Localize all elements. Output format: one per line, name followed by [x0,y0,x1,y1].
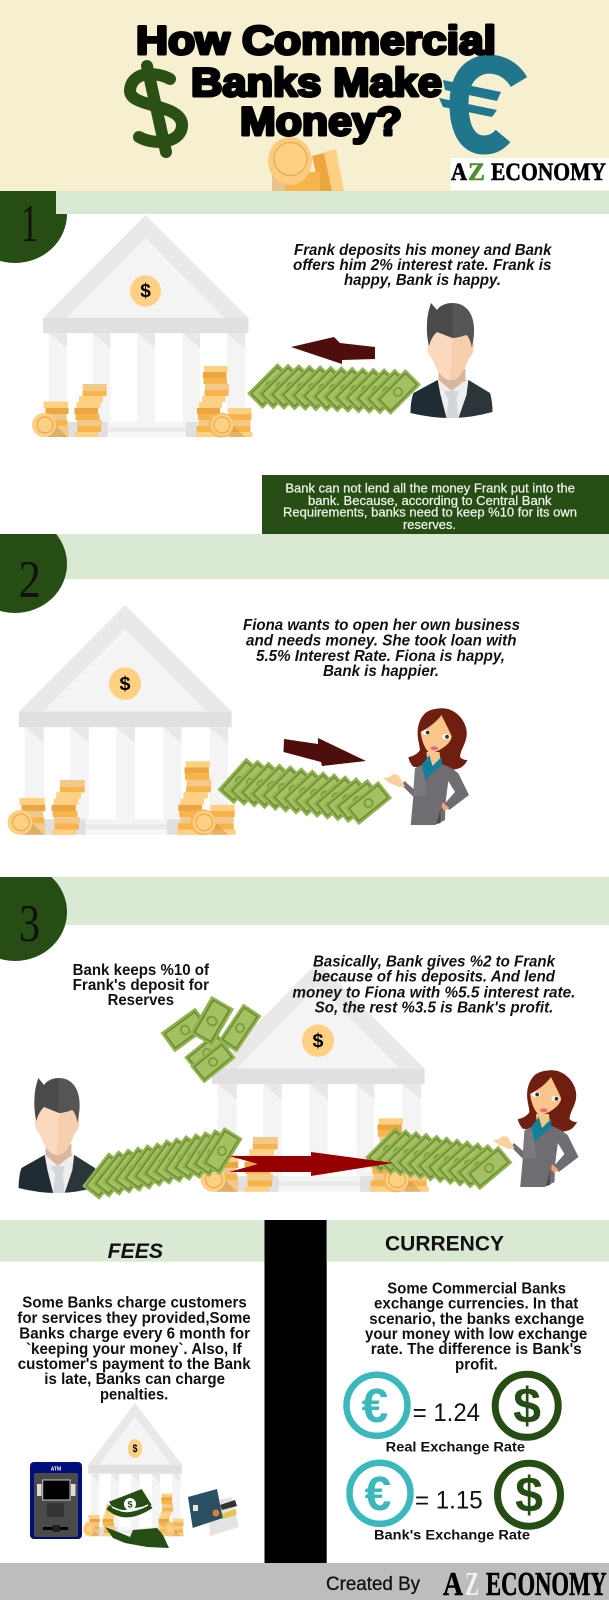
panel: fees [0,1220,264,1548]
text: Fiona wants: 5.5% Interest Rate. Fiona is happy, [256,648,505,665]
callout: reserves: reserves. [403,518,456,532]
bank's exchange rate row: = 1.15 [415,1486,483,1514]
icon: ATM [30,1462,82,1539]
icon: credit cards [188,1489,239,1536]
number 2: 2 [18,551,41,609]
arrow: red flow [229,1152,393,1176]
text: Bank keeps reserves: Reserves [108,992,174,1009]
number circle 3 [0,877,67,961]
real exchange rate row: Real Exchange Rate [386,1440,526,1455]
text: Basically: So, the rest %3.5 is Bank's profit. [315,1000,553,1017]
currency text: scenario, the banks exchange [369,1311,585,1328]
callout: reserves: bank. Because, according to Central Bank [308,494,552,508]
text: Basically: because of his deposits. And lend [313,969,556,986]
bank 1: $ [140,281,151,302]
bank small: $ [133,1443,138,1456]
panel: currency [327,1220,609,1542]
number 3: 3 [19,895,40,953]
currency text: profit. [455,1356,498,1373]
logo: AZ Economy: A [451,159,467,186]
text: Fiona wants: Bank is happier. [323,663,439,680]
real exchange rate row: $ [513,1378,541,1434]
fees text: for services they provided,Some [17,1310,251,1327]
callout: reserves: Requirements, banks need to keep %10 for its own [283,506,577,520]
money pile: reserves [160,996,262,1083]
fees band [0,1220,264,1262]
currency band [327,1220,609,1262]
currency heading: CURRENCY [385,1233,504,1256]
fees text: customer's payment to the Bank [18,1356,251,1373]
text: Basically: Basically, Bank gives %2 to Frank [313,954,556,971]
number circle 2 [0,534,67,613]
currency text [365,1280,588,1373]
text: Fiona wants: Fiona wants to open her own business [243,617,520,634]
arrow: to Fiona [284,738,366,766]
section 2 band [0,534,609,579]
money stack 3 right [365,1127,513,1190]
person: Fiona [383,708,469,825]
footer: Created By [326,1574,420,1595]
fees text [17,1295,251,1403]
divider: black column [264,1220,327,1563]
section 1 band [56,191,609,214]
footer [0,1563,609,1600]
person: Frank [19,1078,97,1193]
title: Money? [240,100,402,144]
text: Bank keeps reserves [73,962,210,1009]
fees text: penalties. [100,1386,168,1403]
bank's exchange rate row: $ [515,1467,543,1523]
currency text: your money with low exchange [365,1326,588,1343]
arrow: to bank [291,337,375,364]
text: Bank keeps reserves: Frank's deposit for [73,977,209,994]
bank 1 [32,215,252,438]
bank 2 [8,605,236,835]
icon: hand with money [105,1489,169,1548]
callout: reserves: Bank can not lend all the money Frank put into the [285,482,575,496]
icon: euro sign [439,64,519,145]
bank's exchange rate row: € [365,1468,391,1521]
callout: reserves [262,475,609,534]
title: How Commercial [136,19,496,63]
title [136,19,496,144]
bank small [83,1403,184,1536]
title: Banks Make [191,61,442,105]
icon: ATM: ATM [51,1466,61,1472]
fees text: is late, Banks can charge [44,1371,225,1388]
money stack 2 [217,758,392,825]
fees heading: FEES [108,1240,163,1263]
logo: AZ Economy [450,158,609,190]
logo: AZ Economy: Z [468,159,485,186]
text: Basically [292,954,575,1017]
person: Fiona [493,1070,578,1187]
money stack 3 left [82,1127,243,1200]
text: Bank keeps reserves: Bank keeps %10 of [73,962,210,979]
number circle 1 [0,165,67,263]
icon: hand with money: $ [127,1500,133,1510]
bank 3: $ [313,1030,324,1052]
person: Frank [410,303,492,418]
icon: coins [268,137,344,191]
panel: header [0,0,609,191]
bank 2: $ [120,673,131,695]
text: Frank deposits: Frank deposits his money and Bank [294,242,553,259]
text: Frank deposits: offers him 2% interest rate. Frank is [293,257,552,274]
currency text: exchange currencies. In that [374,1295,578,1312]
text: Frank deposits: happy, Bank is happy. [344,272,501,289]
fees text: Banks charge every 6 month for [19,1325,250,1342]
bank's exchange rate row [350,1463,560,1542]
number 1: 1 [21,195,38,253]
real exchange rate row: = 1.24 [413,1399,480,1427]
real exchange rate row: € [362,1380,388,1433]
text: Frank deposits [293,242,553,289]
fees text: `keeping your money`. Also, If [26,1341,243,1358]
text: Fiona wants [243,617,520,680]
money stack 1 [247,363,421,415]
currency text: Some Commercial Banks [387,1280,566,1297]
bank 3 [201,962,429,1192]
icon: dollar sign [130,66,182,152]
bank's exchange rate row: Bank's Exchange Rate [374,1527,531,1542]
text: Fiona wants: and needs money. She took loan with [246,633,516,650]
currency text: rate. The difference is Bank's [371,1341,582,1358]
fees text: Some Banks charge customers [22,1295,247,1312]
real exchange rate row [346,1374,558,1455]
section 3 band [0,877,609,925]
text: Basically: money to Fiona with %5.5 interest rate. [292,984,575,1001]
